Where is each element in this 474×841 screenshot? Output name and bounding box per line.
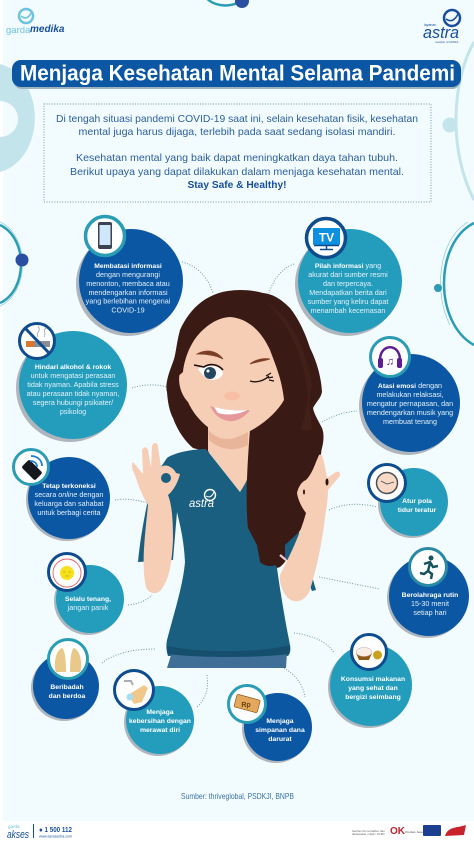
left arm and hand [132, 443, 180, 593]
illustration: woman [132, 290, 340, 668]
text [398, 498, 437, 514]
icon: runner [410, 548, 446, 586]
text: Beribadah [50, 684, 84, 691]
intro text box: Stay Safe & Healthy! [188, 180, 286, 191]
tip: tetap terkoneksi [14, 450, 110, 541]
footer: regulator logos: OK [390, 826, 406, 837]
text: segera hubungi psikiater/ [33, 398, 113, 407]
text: Mendapatkan berita dari [309, 288, 387, 297]
icon: phone [86, 216, 124, 256]
text [402, 592, 458, 617]
icon: rice bowl [352, 634, 386, 670]
text [367, 381, 453, 426]
text: tidak nyaman. Apabila stress [27, 380, 119, 389]
shirt logo [189, 490, 216, 510]
logo: astra: astra [423, 23, 459, 42]
text: Selalu tenang, [65, 596, 111, 603]
nose [224, 392, 240, 400]
hair bangs [176, 301, 293, 398]
footer: contact: akses [7, 829, 29, 841]
text: mengatur pernapasan, dan [367, 399, 453, 408]
left eyebrow [197, 351, 223, 359]
right arm and hand [280, 455, 340, 601]
winking eye [250, 373, 274, 382]
text: Berolahraga rutin [402, 592, 458, 599]
icon: television: TV [319, 230, 334, 244]
text: untuk mengatasi perasaan [31, 371, 115, 380]
text: mendengarkan musik yang [367, 408, 453, 417]
icon: clock [368, 464, 406, 502]
tip: atur pola tidur [368, 464, 448, 538]
logo: garda medika: garda [6, 25, 31, 36]
text: Hindari alkohol & rokok [35, 364, 111, 371]
left eye [194, 365, 223, 380]
text: darurat [268, 736, 292, 743]
text: 15-30 menit [411, 599, 449, 608]
logo: astra: member of ASTRA [435, 40, 458, 44]
text: tidur teratur [398, 507, 437, 514]
text [34, 483, 104, 517]
text: kebersihan dengan [129, 718, 191, 725]
text: menambah kecemasan [311, 306, 385, 315]
text: mendengarkan informasi [88, 288, 168, 297]
intro text box: Kesehatan mental yang baik dapat meningkatkan daya tahan tubuh. [76, 153, 398, 164]
tip: konsumsi makanan [328, 634, 412, 728]
tip: menjaga simpanan [228, 686, 312, 763]
dotted connectors [102, 262, 380, 707]
text: Atur pola [402, 498, 432, 505]
text [27, 364, 119, 416]
icon: praying hands [48, 640, 88, 678]
text: Menjaga [266, 718, 294, 725]
footer: contact [7, 824, 72, 841]
footer: contact: ● 1 500 112 [39, 827, 72, 834]
footer: contact: garda [8, 824, 20, 829]
hair back [166, 290, 324, 568]
source credit: Sumber: thriveglobal, PSDKJI, BNPB [181, 791, 294, 801]
text [341, 676, 405, 701]
text: dengan mengurangi [96, 270, 160, 279]
text: COVID-19 [111, 306, 145, 314]
mouth [210, 406, 250, 421]
tip: beribadah [31, 640, 99, 721]
text: psikolog [60, 407, 86, 416]
tip: menjaga kebersihan [114, 670, 194, 756]
text: dan terpercaya. [323, 279, 373, 288]
footer: contact: www.asrasastra.com [39, 834, 72, 838]
text [255, 718, 305, 743]
text: Menjaga [146, 709, 174, 716]
icon: mobile signal [14, 450, 48, 484]
text: membuat tenang [383, 417, 437, 426]
text: Pilah informasi yang [315, 261, 381, 270]
tip: membatasi informasi [76, 216, 183, 336]
text: simpanan dana [255, 727, 305, 734]
footer: regulator logos: diawasi oleh OJK [352, 832, 385, 836]
logo: astra [423, 10, 460, 44]
logo: astra: layanan [424, 23, 436, 27]
footer: regulator logos [352, 825, 466, 837]
icon: no smoking [20, 324, 54, 358]
text: Atasi emosi dengan [378, 381, 442, 390]
text: jangan panik [67, 603, 109, 612]
icon: headphones: ♫ [386, 356, 394, 368]
footer: regulator logos: Garda Oto terdaftar dan [352, 829, 385, 833]
right sleeve strip [285, 532, 316, 591]
text: menonton, membaca atau [86, 279, 170, 288]
logo: garda medika [6, 9, 65, 36]
text: Konsumsi makanan [341, 676, 405, 683]
text: Tetap terkoneksi [42, 483, 96, 490]
right hand ring detail [303, 490, 305, 494]
hair over shoulder [247, 430, 322, 566]
hair tie [280, 555, 286, 560]
text: sumber yang keliru dapat [308, 297, 388, 306]
neck [208, 425, 251, 492]
text: keluarga dan sahabat [34, 499, 104, 508]
text [65, 596, 111, 612]
text: akurat dari sumber resmi [308, 270, 388, 279]
text: melakukan relaksasi, [376, 390, 444, 399]
text [86, 263, 171, 314]
text: atau perasaan tidak nyaman, [27, 389, 119, 398]
text [308, 261, 388, 315]
intro text box [44, 104, 431, 202]
text: secara online dengan [35, 490, 103, 499]
text: bergizi seimbang [345, 694, 401, 701]
icon: calm face [48, 554, 86, 590]
shirt [138, 449, 290, 656]
text [49, 684, 86, 700]
text: merawat diri [140, 727, 180, 734]
logo: garda medika: medika [30, 24, 65, 35]
tip: hindari alkohol dan rokok [16, 324, 127, 442]
title bar: Menjaga Kesehatan Mental Selama Pandemi [20, 60, 455, 86]
text: yang berlebihan mengenai [86, 296, 171, 306]
face [179, 317, 284, 438]
left hand ring hole [161, 473, 171, 483]
tip: berolahraga rutin [387, 548, 469, 638]
tip: atasi emosi [359, 338, 460, 455]
text: yang sehat dan [348, 685, 398, 692]
tip: pilah informasi [295, 218, 402, 336]
trousers [167, 652, 287, 668]
tip: selalu tenang [48, 554, 124, 635]
text: untuk berbagi cerita [37, 508, 101, 517]
text: dan berdoa [49, 693, 86, 700]
right eyebrow [250, 359, 270, 364]
intro text box: Di tengah situasi pandemi COVID-19 saat ini, selain kesehatan fisik, kesehatan [56, 114, 418, 125]
shirt logo: astra [189, 498, 214, 510]
text [129, 709, 191, 734]
hem [167, 645, 290, 657]
footer: regulator logos: Otoritas Jasa [405, 830, 423, 834]
decorative rings [0, 0, 474, 345]
icon: washing hands [114, 670, 154, 710]
hair highlight [262, 300, 312, 535]
text: setiap hari [413, 608, 447, 617]
intro text box: Berikut upaya yang dapat dilakukan dalam menjaga kesehatan mental. [70, 167, 404, 178]
text: Membatasi informasi [94, 263, 162, 270]
intro text box: mental juga harus dijaga, terlebih pada saat sedang isolasi mandiri. [78, 127, 396, 138]
icon: money: Rp [241, 702, 251, 709]
